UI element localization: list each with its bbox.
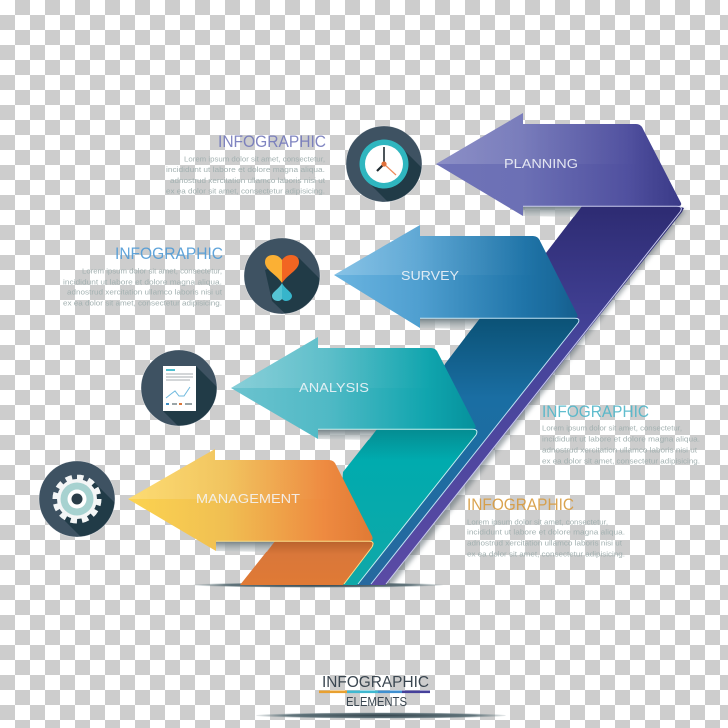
body text: planning info xyxy=(166,154,326,196)
arrow: management xyxy=(128,449,373,552)
footer subheading: ELEMENTS xyxy=(346,694,407,709)
body text: analysis info: adnostrud xercitation ullamco laboris nisi ut xyxy=(542,446,698,454)
body text: planning info: ex ea dolor sit amet, consectetur adipisicing. xyxy=(166,186,325,196)
footer heading: INFOGRAPHIC xyxy=(322,674,429,691)
soft shadow of ribbon xyxy=(378,210,686,585)
body text: survey info xyxy=(63,266,223,308)
ribbon fold: planning xyxy=(350,206,684,585)
arrow: planning xyxy=(436,113,681,217)
arrow label: management: MANAGEMENT xyxy=(196,491,300,506)
body text: management info xyxy=(467,518,625,558)
body text: analysis info: incididunt ut labore et dolore magna aliqua. xyxy=(542,434,700,444)
icon: clock xyxy=(346,126,422,202)
body text: survey info: adnostrud xercitation ullamco laboris nisi ut xyxy=(67,288,223,296)
text block: management info xyxy=(467,496,625,558)
footer title xyxy=(319,674,430,709)
footer shadow xyxy=(256,712,506,718)
icon: gear xyxy=(38,460,115,538)
body text: management info: ex ea dolor sit amet, consectetur adipisicing. xyxy=(467,550,625,558)
heading: planning info: INFOGRAPHIC xyxy=(218,133,326,151)
arrow label: survey: SURVEY xyxy=(401,268,459,283)
body text: management info: adnostrud xercitation ullamco laboris nisi ut xyxy=(467,538,623,548)
heading: analysis info: INFOGRAPHIC xyxy=(542,403,649,421)
body text: analysis info xyxy=(542,424,700,466)
body text: analysis info: ex ea dolor sit amet, consectetur adipisicing. xyxy=(542,456,700,466)
footer colour bar xyxy=(319,690,430,693)
body text: survey info: ex ea dolor sit amet, consectetur adipisicing. xyxy=(63,298,222,308)
body text: survey info: Lorem ipsum dolor sit amet, consectetur, xyxy=(82,266,222,276)
icon: hearts xyxy=(244,238,320,314)
ribbon fold: management xyxy=(240,541,374,585)
text block: planning info xyxy=(166,133,326,196)
ground shadow xyxy=(193,582,443,588)
arrow: analysis xyxy=(231,337,477,440)
body text: management info: Lorem ipsum dolor sit amet, consectetur, xyxy=(467,518,608,526)
ribbon fold: analysis xyxy=(335,429,478,585)
text block: analysis info xyxy=(542,403,700,466)
text block: survey info xyxy=(63,245,223,308)
body text: survey info: incididunt ut labore et dolore magna aliqua. xyxy=(63,278,222,286)
body text: analysis info: Lorem ipsum dolor sit amet, consectetur, xyxy=(542,424,682,432)
body text: management info: incididunt ut labore et dolore magna aliqua. xyxy=(467,528,625,536)
body text: planning info: adnostrud xercitation ullamco laboris nisi ut xyxy=(170,176,326,185)
body text: planning info: incididunt ut labore et dolore magna aliqua. xyxy=(166,165,325,174)
heading: management info: INFOGRAPHIC xyxy=(467,496,574,514)
arrow: survey xyxy=(334,225,579,329)
arrow label: analysis: ANALYSIS xyxy=(299,380,369,395)
ribbon fold: survey xyxy=(345,318,580,585)
heading: survey info: INFOGRAPHIC xyxy=(115,245,223,263)
arrow label: planning: PLANNING xyxy=(504,156,578,171)
icon: document xyxy=(140,350,218,426)
body text: planning info: Lorem ipsum dolor sit amet, consectetur, xyxy=(184,154,325,164)
